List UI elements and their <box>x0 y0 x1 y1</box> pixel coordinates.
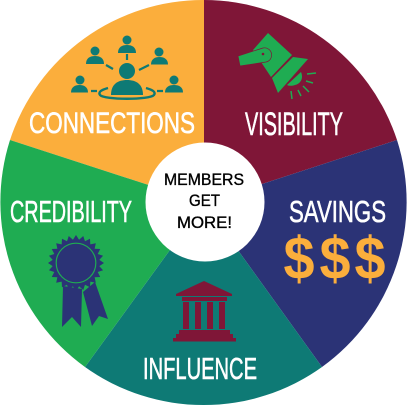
panel: influence sector <box>85 203 322 405</box>
icon: megaphone <box>238 33 316 99</box>
panel: connections sector <box>10 0 204 203</box>
icon: connected people <box>71 36 183 99</box>
panel: credibility sector <box>0 140 204 367</box>
icon: award ribbon <box>48 235 108 327</box>
icon: dollar signs: $ <box>284 225 314 292</box>
icon: dollar signs: $ <box>320 225 350 292</box>
label: connections: CONNECTIONS <box>29 107 195 140</box>
hub text: members get more: GET <box>189 192 220 210</box>
icon: dollar signs <box>284 225 386 292</box>
hub text: members get more: MEMBERS <box>164 171 244 189</box>
icon: dollar signs: $ <box>354 225 386 292</box>
icon: institution building <box>173 281 236 342</box>
label: influence: INFLUENCE <box>143 351 257 386</box>
panel: visibility sector <box>204 0 397 203</box>
label: credibility: CREDIBILITY <box>10 194 132 229</box>
label: visibility: VISIBILITY <box>245 106 343 142</box>
panel: savings sector <box>204 140 407 367</box>
hub text: members get more: MORE! <box>177 214 232 232</box>
center hub <box>146 142 264 262</box>
hub text: members get more <box>164 171 244 232</box>
